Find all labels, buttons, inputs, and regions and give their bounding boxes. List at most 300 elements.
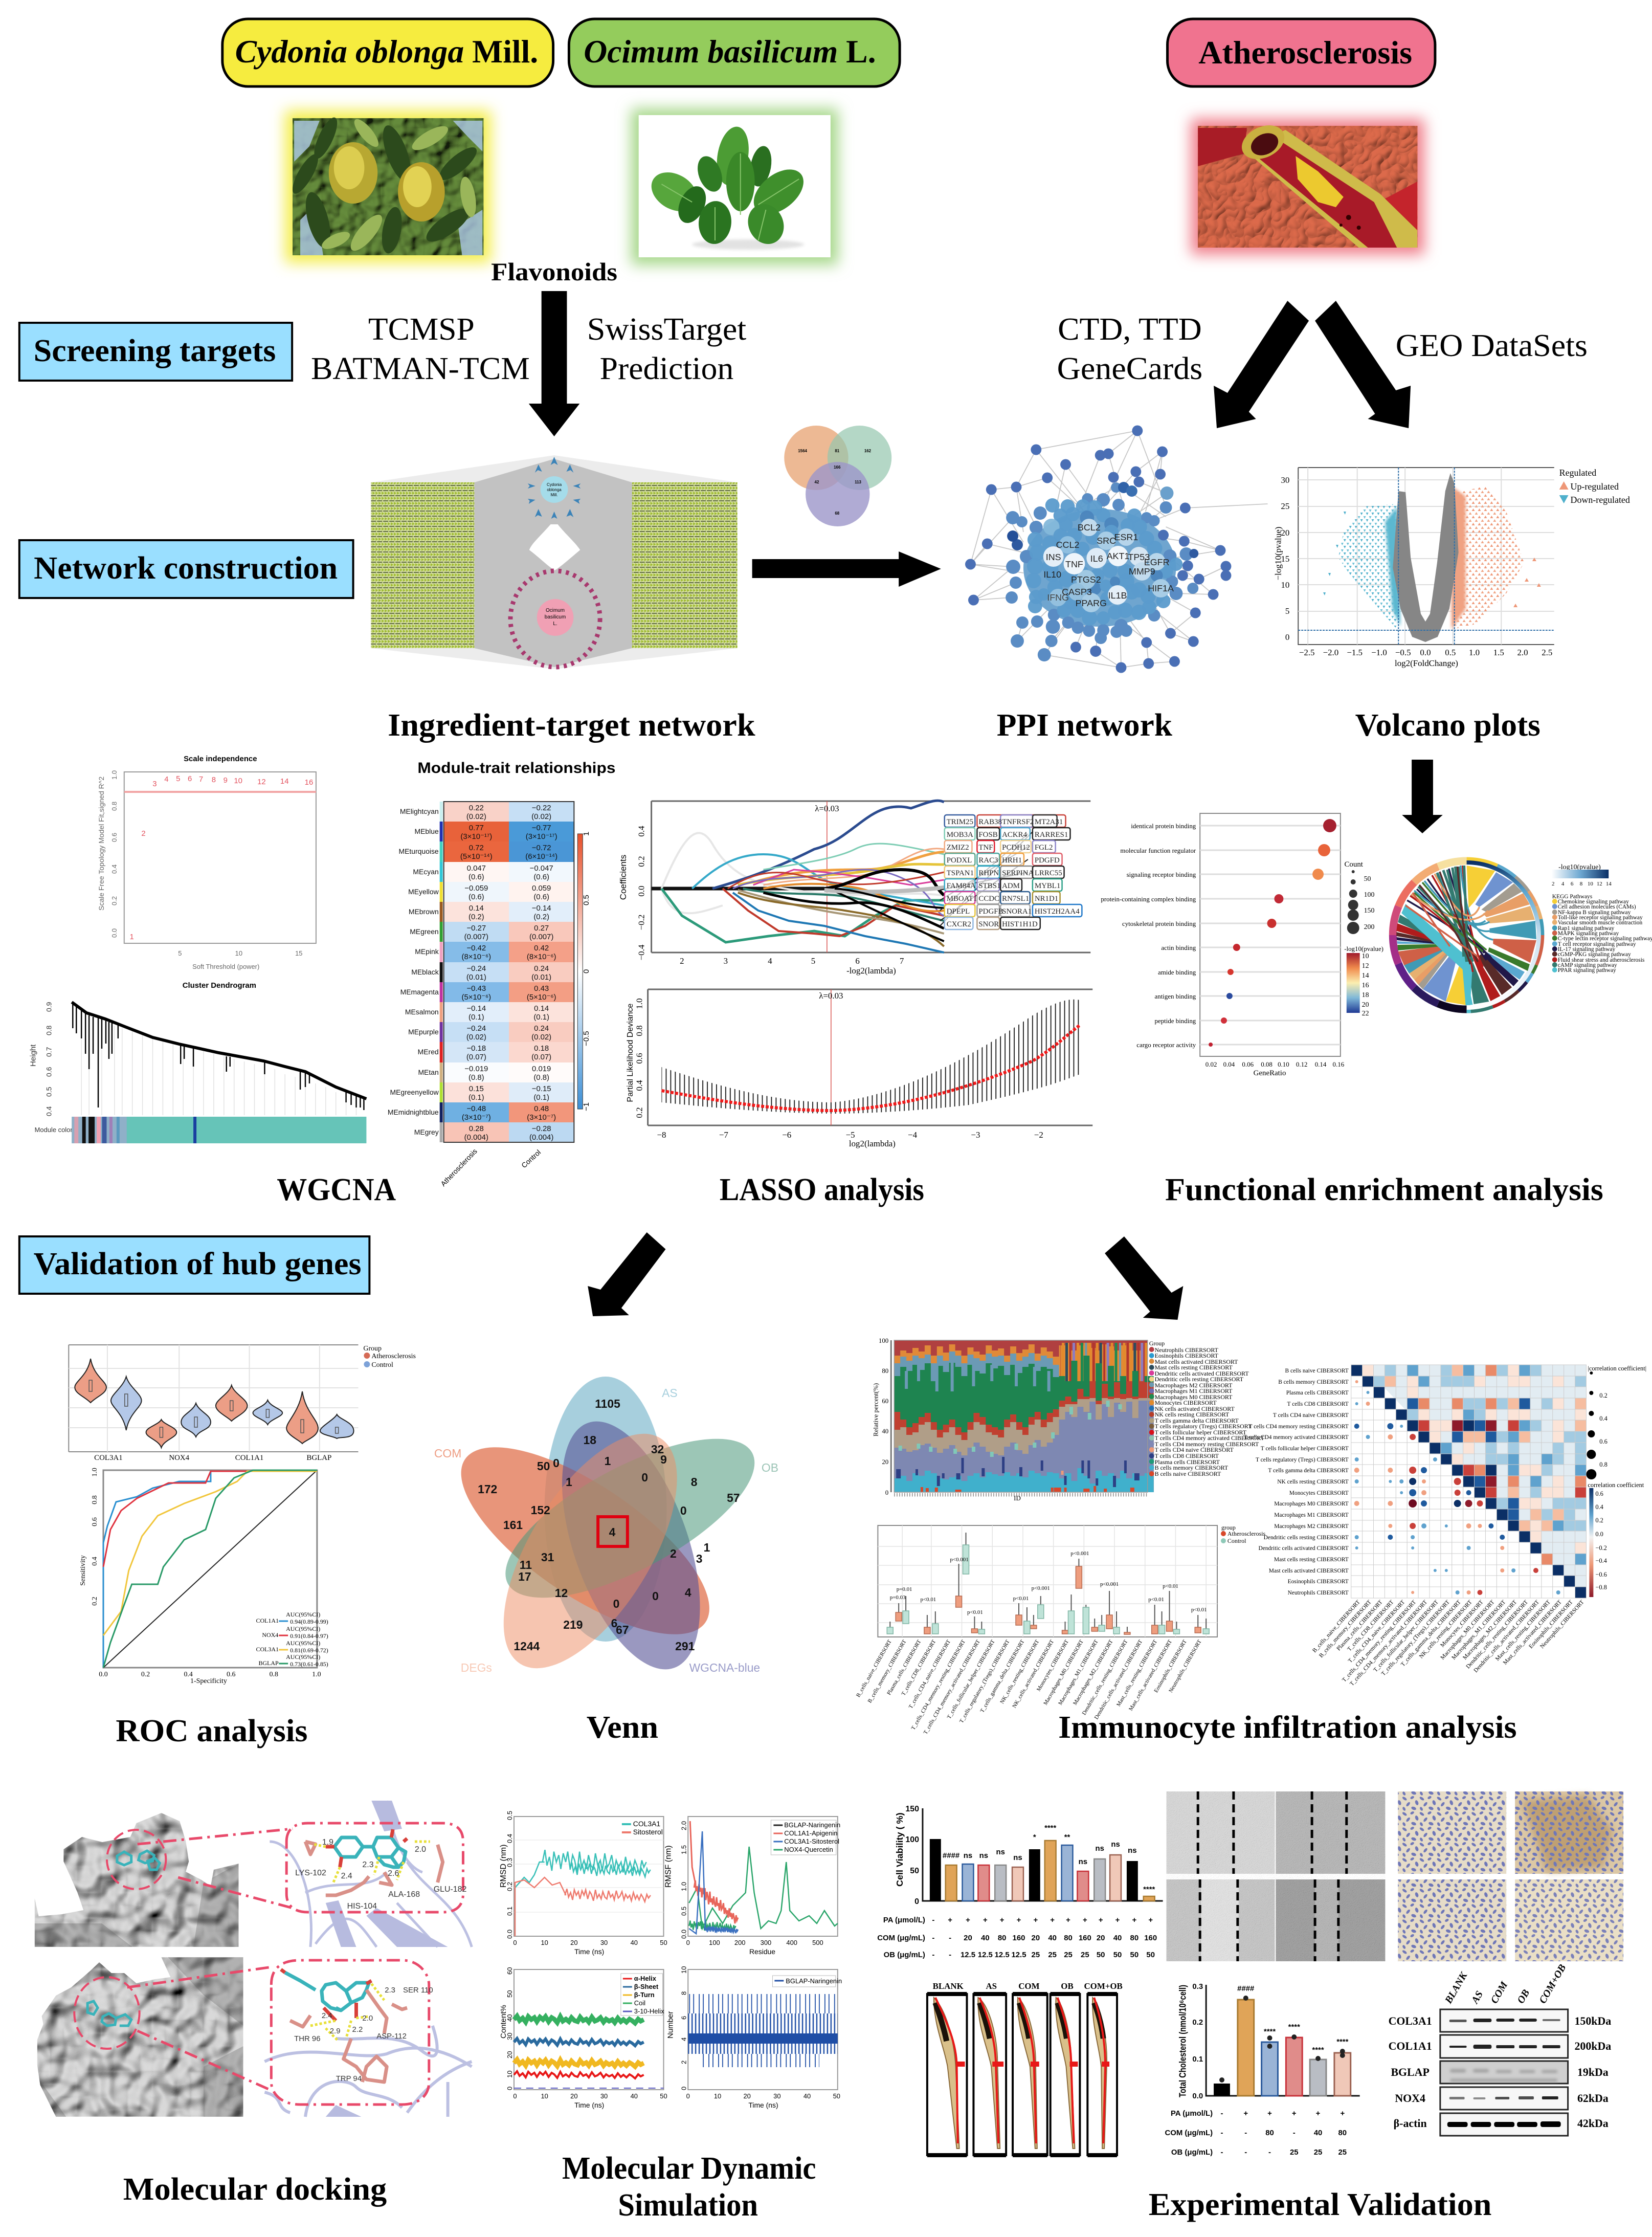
chart: LASSO cross-validation: Partial Likelihood Deviance	[626, 1003, 635, 1102]
legend: immune cell types: NK cells resting CIBERSORT	[1155, 1411, 1230, 1418]
chart: hydrogen bond number: 0	[686, 2092, 690, 2100]
module labels: MEmidnightblue	[388, 1108, 439, 1116]
chart: RMSD: RMSD (nm)	[499, 1845, 508, 1888]
legend: -log10(pvalue): 18	[1362, 991, 1369, 999]
chart: secondary structure content: 50	[660, 2092, 667, 2100]
legend: immune cell types: Macrophages M2 CIBERSORT	[1155, 1382, 1233, 1389]
viability dose table: 50	[1113, 1951, 1122, 1959]
western blot panel: NOX4	[1395, 2092, 1425, 2105]
ROC curve: 0.2	[91, 1597, 99, 1606]
viability dose table: 25	[1032, 1951, 1040, 1959]
ROC curve: 0.8	[91, 1495, 99, 1504]
legend: -log10(pvalue): 22	[1362, 1010, 1369, 1017]
heatmap: module-trait relationships: −0.14	[532, 904, 551, 913]
western blot panel: 150kDa	[1574, 2014, 1611, 2027]
viability dose table: +	[1050, 1916, 1055, 1924]
violin plot	[69, 1345, 416, 1462]
viability dose table: +	[948, 1916, 952, 1924]
western blot panel: OB	[1515, 1987, 1532, 2006]
chart: cluster dendrogram: 0.5	[45, 1087, 53, 1097]
chart: secondary structure content: Time (ns)	[574, 2101, 604, 2109]
row labels: B cells naive CIBERSORT	[1285, 1368, 1349, 1374]
legend: KEGG pathways: MAPK signaling pathway	[1558, 931, 1619, 937]
module labels	[388, 807, 439, 1136]
chart: scale independence: 0.6	[110, 833, 118, 842]
legend: -log10(pvalue) bar: 6	[1571, 881, 1574, 887]
chart: RMSF: 0.5	[680, 1907, 687, 1916]
volcano plot: 10	[1281, 580, 1289, 590]
viability dose table: 50	[1130, 1951, 1138, 1959]
residues 2	[290, 1990, 407, 2082]
heading: Molecular Dynamic Simulation: Simulation	[618, 2188, 758, 2223]
western blot panel: 200kDa	[1574, 2040, 1611, 2052]
viability dose table	[877, 1916, 1157, 1959]
chart: LASSO cross-validation: −7	[719, 1130, 728, 1140]
docking detail: complex 1: GLU-182	[434, 1885, 466, 1894]
set labels: OB	[762, 1461, 778, 1474]
heatmap: module-trait relationships: −0.42	[466, 944, 486, 953]
bar chart: cell viability: 0	[914, 1897, 919, 1906]
viability dose table: +	[1115, 1916, 1120, 1924]
viability dose table: 160	[1013, 1934, 1025, 1942]
downregulated cloud	[1323, 504, 1400, 629]
violin legend: Atherosclerosis	[371, 1353, 416, 1360]
heatmap: module-trait relationships: −0.77	[532, 824, 551, 832]
cholesterol dose table: 80	[1338, 2129, 1347, 2137]
bar chart: total cholesterol: 0.0	[1192, 2092, 1203, 2100]
chart: LASSO coefficient paths: -log2(lambda)	[846, 966, 896, 976]
bar chart: cell viability: ns	[964, 1851, 972, 1860]
chart: scale independence	[97, 755, 316, 970]
gene label boxes: TNFRSF2	[1002, 818, 1034, 826]
chart: RMSF: RMSF (nm)	[664, 1845, 673, 1888]
viability dose table: +	[1000, 1916, 1004, 1924]
bar chart: cell viability: ns	[996, 1848, 1005, 1856]
box plot cell labels: T_cells_CD4_memory_activated_CIBERSORT	[922, 1638, 981, 1735]
heatmap: module-trait relationships: (0.1)	[468, 1013, 484, 1022]
docking detail: complex 2: THR 96	[294, 2034, 321, 2043]
chart: scale independence: 10	[234, 777, 242, 785]
small venn: targets overlap	[784, 426, 891, 526]
violin legend: Control	[371, 1361, 393, 1369]
box plot: immune cell comparison: p<0.01	[1191, 1607, 1207, 1613]
section label: Validation of hub genes	[19, 1236, 369, 1294]
chart: secondary structure content: 20	[570, 2092, 578, 2100]
heatmap: module-trait relationships: Control	[520, 1148, 542, 1169]
text: SwissTarget Prediction: SwissTarget	[587, 311, 747, 347]
gene label boxes: CXCR2	[947, 920, 971, 928]
legend: correlation size: 0.8	[1599, 1461, 1608, 1468]
legend: immune cell types: Group	[1149, 1340, 1165, 1347]
heatmap: module-trait relationships: −0.48	[466, 1104, 486, 1113]
chart: hydrogen bond number: 20	[743, 2092, 751, 2100]
herb label: Ocimum basilicum: Ocimum basilicum L.	[584, 33, 876, 70]
heatmap: module-trait relationships: −0.047	[530, 864, 553, 873]
gene label boxes: MT2A31	[1035, 818, 1063, 826]
chart: hydrogen bond number: 40	[803, 2092, 811, 2100]
module colour bar	[72, 1117, 366, 1143]
heatmap: module-trait relationships: 0.14	[534, 1004, 549, 1013]
photo: quince fruit	[285, 110, 491, 263]
chart: GO dot plot: identical protein binding	[1131, 822, 1196, 830]
heatmap: module-trait relationships: (5×10⁻⁶)	[527, 993, 556, 1002]
herb label: Cydonia oblonga: Cydonia oblonga Mill.	[235, 33, 538, 70]
viability dose table: -	[932, 1951, 934, 1959]
legend: regulated: Regulated	[1559, 468, 1596, 478]
residues 1	[305, 1842, 443, 1895]
ROC legend: NOX4	[262, 1631, 278, 1638]
zebrafish staining panels: OB	[1061, 1981, 1074, 1991]
western blot panel: COL1A1	[1389, 2040, 1432, 2052]
gene label boxes: MBOAT1	[947, 895, 977, 903]
column labels: Neutrophils_CIBERSORT	[1539, 1599, 1586, 1650]
node: Ocimum basilicum hub	[510, 571, 600, 667]
node: Cydonia oblonga hub: Mill.	[550, 493, 558, 497]
bar chart: cell viability: Cell Viability ( %)	[895, 1812, 905, 1887]
herb label: Ocimum basilicum	[569, 19, 900, 86]
heatmap: module-trait relationships: −0.24	[466, 1024, 486, 1033]
legend: hydrogen bonds	[772, 1976, 842, 1987]
gene label boxes: HIST1H1D	[1002, 920, 1038, 928]
box plot: immune cell comparison: p<0.01	[1148, 1597, 1164, 1603]
module labels: MEgreen	[410, 927, 439, 936]
target grid: left	[371, 482, 474, 648]
ROC curve: Sensitivity	[79, 1555, 87, 1586]
column labels: Mast_cells_activated_CIBERSORT	[1502, 1599, 1563, 1666]
bar chart: total cholesterol: 0.2	[1192, 2018, 1203, 2027]
row labels: Dendritic cells resting CIBERSORT	[1264, 1535, 1349, 1541]
box plot: immune cell comparison: p<0.001	[1070, 1551, 1089, 1557]
chart: scale independence: 15	[295, 949, 302, 957]
chart: RMSD: 0	[513, 1939, 517, 1946]
chart: RMSF: 0.0	[680, 1930, 687, 1939]
chart: secondary structure content: 0	[513, 2092, 517, 2100]
volcano plot: −0.5	[1395, 648, 1411, 657]
legend: -log10(pvalue) bar: 2	[1552, 881, 1554, 887]
docked ligand 2	[87, 2001, 131, 2026]
chart: cluster dendrogram: 0.6	[45, 1067, 53, 1077]
violin legend	[363, 1345, 416, 1369]
cholesterol dose table: COM (μg/mL)	[1165, 2129, 1213, 2137]
docking detail: complex 1	[138, 1801, 472, 1947]
gene label boxes: RHPN	[978, 869, 999, 877]
chart: RMSD: 40	[631, 1939, 638, 1946]
legend: immune cell types: T cells regulatory (Tregs) CIBERSORT	[1155, 1423, 1252, 1430]
gene label boxes: LRRC55	[1035, 869, 1062, 877]
module labels: MEpink	[415, 947, 439, 956]
gene label boxes: RAB38	[978, 818, 1002, 826]
zebrafish staining panels: COM+OB	[1084, 1981, 1123, 1991]
chart: secondary structure content: 30	[600, 2092, 608, 2100]
legend: KEGG pathways: KEGG Pathways	[1552, 894, 1593, 900]
heatmap: module-trait relationships: 0.18	[534, 1044, 549, 1053]
box plot cell labels: NK_cells_resting_CIBERSORT	[999, 1638, 1041, 1705]
legend: KEGG pathways: NF-kappa B signaling pathway	[1558, 910, 1631, 916]
set counts: 3	[696, 1552, 702, 1565]
violin plot: COL3A1	[94, 1454, 123, 1462]
row labels: Monocytes CIBERSORT	[1289, 1490, 1349, 1496]
heatmap: module-trait relationships: −0.43	[466, 984, 486, 993]
legend: correlation colour: −0.4	[1595, 1557, 1608, 1564]
chart: scale independence: 1.0	[110, 770, 118, 780]
heatmap: module-trait relationships: 0.059	[532, 884, 551, 893]
legend: count: 200	[1364, 923, 1375, 931]
heatmap: module-trait relationships: (0.6)	[468, 893, 484, 901]
cholesterol dose table: +	[1316, 2109, 1321, 2118]
chart: hydrogen bond number: 10	[714, 2092, 721, 2100]
chart: scale independence: 14	[280, 777, 289, 786]
docking detail: complex 2: 2.4	[322, 2011, 332, 2020]
chart: LASSO coefficient paths: 6	[855, 956, 860, 966]
legend: KEGG pathways: cGMP-PKG signaling pathway	[1558, 951, 1631, 958]
text: CTD TTD GeneCards: CTD, TTD	[1058, 311, 1202, 347]
module labels: MEmagenta	[400, 988, 439, 996]
node: Ocimum basilicum hub: Ocimum	[546, 608, 565, 613]
bar chart: total cholesterol: Total Cholesterol (nmol/10⁶cell)	[1177, 1985, 1188, 2097]
row labels: Plasma cells CIBERSORT	[1286, 1390, 1349, 1396]
chart: LASSO cross-validation: 0.8	[635, 1025, 644, 1036]
western blot panel: β-actin	[1394, 2117, 1427, 2130]
western blot panel: COM	[1489, 1979, 1510, 2006]
gene arc gradient ring	[1393, 861, 1467, 1009]
chart: RMSD	[499, 1811, 667, 1956]
colour scale: −1	[582, 1102, 591, 1111]
grid lines	[1351, 1365, 1586, 1598]
column labels: Eosinophils_CIBERSORT	[1528, 1599, 1574, 1650]
box plot cell labels: Eosinophils_CIBERSORT	[1153, 1638, 1188, 1694]
legend: -log10(pvalue) bar: 12	[1597, 881, 1602, 887]
set counts: 1	[704, 1541, 710, 1554]
set counts: 219	[563, 1618, 583, 1631]
viability dose table: 160	[1144, 1934, 1157, 1942]
heatmap: module-trait relationships: (0.01)	[466, 973, 486, 982]
western blot panel	[1389, 1962, 1611, 2136]
chart: scale independence: Scale Free Topology Model Fit,signed R^2	[97, 777, 105, 911]
heading: ROC analysis: ROC analysis	[116, 1714, 307, 1748]
heatmap: module-trait relationships: −0.15	[532, 1084, 551, 1093]
chart: hydrogen bond number: 30	[773, 2092, 781, 2100]
legend: immune cell types: NK cells activated CIBERSORT	[1155, 1405, 1235, 1412]
chart: secondary structure content	[499, 1967, 667, 2109]
small venn: targets overlap: 1564	[798, 449, 808, 453]
legend: correlation size: 0.6	[1599, 1438, 1608, 1445]
heatmap: module-trait relationships: (0.1)	[468, 1093, 484, 1102]
set counts: 18	[583, 1433, 596, 1447]
chart: hydrogen bond number: 50	[833, 2092, 840, 2100]
legend: KEGG pathways: Toll-like receptor signaling pathway	[1558, 915, 1643, 921]
chart: GO dot plot: antigen binding	[1154, 992, 1196, 1000]
colour scale	[577, 832, 591, 1111]
bar chart: cell viability: 150	[905, 1805, 919, 1813]
chart: LASSO cross-validation: log2(lambda)	[849, 1139, 896, 1148]
box plot: immune cell comparison: p=0.01	[897, 1586, 912, 1592]
gene label boxes: SERPINA	[1002, 869, 1034, 877]
viability dose table: +	[1066, 1916, 1070, 1924]
mid-degree nodes	[1006, 482, 1198, 661]
chart: LASSO coefficient paths: Coefficients	[618, 855, 628, 900]
arrow: flavonoids to network	[529, 291, 579, 436]
legend: immune cell types: T cells CD4 memory activated CIBERSORT	[1155, 1434, 1265, 1442]
chart: hydrogen bond number: Time (ns)	[748, 2101, 778, 2109]
gene label boxes: HRH1	[1002, 856, 1022, 865]
legend: KEGG pathways: cAMP signaling pathway	[1558, 962, 1617, 968]
chart: RMSD: 0.3	[506, 1858, 514, 1867]
gene label boxes: HIST2H2AA4	[1035, 907, 1080, 916]
colour scale: 0	[582, 969, 591, 973]
PPI network: TP53	[1128, 552, 1150, 562]
set counts: 31	[541, 1551, 554, 1564]
legend: immune cell types: Neutrophils CIBERSORT	[1155, 1346, 1219, 1354]
box plot: immune cell comparison: p<0.01	[1163, 1583, 1178, 1589]
small venn: targets overlap: 68	[835, 511, 840, 516]
heatmap: module-trait relationships: 0.24	[534, 1024, 549, 1033]
column labels: NK_cells_resting_CIBERSORT	[1418, 1599, 1474, 1660]
ROC legend: AUC(95%CI)	[286, 1653, 320, 1660]
set counts: 32	[651, 1443, 664, 1456]
cholesterol dose table: -	[1221, 2129, 1223, 2137]
bar chart: total cholesterol: ****	[1264, 2027, 1276, 2036]
PPI network: IFNG	[1047, 592, 1069, 603]
chart: scale independence: 0.8	[110, 802, 118, 811]
viability dose table: 50	[1097, 1951, 1105, 1959]
violin plot: BGLAP	[306, 1454, 331, 1462]
set counts: 2	[670, 1547, 677, 1560]
stacked bar: immune cell fractions: 0	[885, 1489, 888, 1496]
box plot cell labels: Macrophages_M2_CIBERSORT	[1072, 1638, 1114, 1706]
module labels: MEpurple	[408, 1028, 439, 1036]
chart: hydrogen bond number	[666, 1966, 842, 2109]
volcano plot: 5	[1285, 606, 1289, 616]
colour scale: 1	[582, 832, 591, 836]
set counts: 1	[605, 1454, 611, 1468]
viability dose table: 50	[1146, 1951, 1155, 1959]
legend: RMSD: COL3A1	[633, 1820, 660, 1828]
module labels: MEcyan	[413, 868, 439, 876]
chart: cluster dendrogram: Module colors	[35, 1126, 76, 1134]
volcano plot: 1.0	[1469, 648, 1480, 657]
heatmap: module-trait relationships: −0.28	[532, 1124, 551, 1133]
legend: correlation colour: 0.4	[1595, 1503, 1604, 1511]
gene label boxes: FAM84A	[947, 882, 976, 890]
viability dose table: 12.5	[995, 1951, 1010, 1959]
chart: RMSF: 1.5	[680, 1845, 687, 1854]
bar chart: cell viability: *	[1033, 1833, 1036, 1842]
legend: immune cell types: T cells CD4 memory resting CIBERSORT	[1155, 1441, 1259, 1448]
set labels: AS	[662, 1386, 678, 1400]
set labels: WGCNA-blue	[689, 1661, 760, 1674]
legend: RMSD: Sitosterol	[633, 1828, 663, 1836]
row labels: T cells follicular helper CIBERSORT	[1261, 1446, 1349, 1452]
correlation matrix: immune cells	[1243, 1365, 1646, 1687]
legend: immune cell types: Eosinophils CIBERSORT	[1155, 1352, 1219, 1359]
chart: LASSO cross-validation: 0.2	[635, 1107, 644, 1118]
heatmap title: Module-trait relationships	[417, 760, 615, 777]
legend: RMSF: COL1A1-Apigenin	[784, 1829, 837, 1837]
docking detail: complex 2: 2.0	[362, 2014, 373, 2023]
chart: LASSO coefficient paths: −0.2	[637, 915, 646, 930]
PPI network: BCL2	[1078, 522, 1101, 533]
legend: immune cell types: Mast cells activated CIBERSORT	[1155, 1358, 1238, 1365]
legend: correlation colour: 0.2	[1595, 1517, 1603, 1524]
heatmap: module-trait relationships: (0.07)	[531, 1053, 551, 1061]
chart: RMSF: 400	[786, 1939, 797, 1946]
column labels: T_cells_gamma_delta_CIBERSORT	[1400, 1599, 1462, 1668]
box plot cell labels: Neutrophils_CIBERSORT	[1168, 1638, 1203, 1694]
box plot: immune cell comparison: p=0.03	[890, 1594, 906, 1601]
pathway ribbons right	[1459, 866, 1536, 1005]
column labels: T_cells_CD8_CIBERSORT	[1346, 1599, 1395, 1652]
chart: LASSO cross-validation: −2	[1034, 1130, 1043, 1140]
chart: scale independence: 16	[305, 778, 313, 787]
chart: GO dot plot: 0.02	[1205, 1060, 1217, 1068]
unchanged points	[1393, 473, 1459, 642]
box plot: immune cell comparison	[855, 1524, 1266, 1735]
bar chart: cell viability: ns	[979, 1851, 988, 1860]
photo: basil leaves	[631, 108, 838, 265]
chart: scale independence: 4	[164, 775, 169, 784]
PPI network: CCL2	[1056, 540, 1079, 550]
row labels: Mast cells resting CIBERSORT	[1274, 1557, 1349, 1563]
bar chart: total cholesterol: ****	[1288, 2023, 1300, 2031]
volcano plot: −2.5	[1299, 648, 1314, 657]
volcano plot: −1.0	[1371, 648, 1387, 657]
gene label boxes: FGL2	[1035, 844, 1053, 852]
cholesterol dose table: PA (μmol/L)	[1171, 2109, 1213, 2118]
chart: cluster dendrogram: 0.9	[45, 1002, 53, 1012]
chart: scale independence: 0.0	[110, 928, 118, 938]
legend: -log10(pvalue) bar: 4	[1561, 881, 1565, 887]
bar chart: total cholesterol	[1165, 1982, 1360, 2157]
gene label boxes: SNOR	[978, 920, 999, 928]
text: TCMSP BATMAN-TCM	[311, 311, 530, 386]
set counts: 50	[537, 1459, 550, 1473]
module labels: MEblack	[411, 968, 439, 976]
chart: RMSD: 0.5	[506, 1811, 514, 1820]
legend: KEGG pathways: T cell receptor signaling pathway	[1558, 941, 1636, 947]
ROC curve: 0.2	[141, 1671, 150, 1678]
docking detail: complex 2: TRP 94	[336, 2074, 362, 2083]
set counts: 291	[675, 1640, 695, 1653]
legend: KEGG pathways: Rap1 signaling pathway	[1558, 925, 1615, 932]
legend: immune cell types: T cells gamma delta CIBERSORT	[1155, 1417, 1239, 1424]
stacked bar: immune cell fractions: Relative percent(%)	[872, 1383, 879, 1436]
target grid: right	[632, 482, 738, 648]
legend: immune cell types: Monocytes CIBERSORT	[1155, 1399, 1217, 1406]
stacked bar: immune cell fractions: 40	[882, 1427, 888, 1435]
chart: cluster dendrogram: 0.8	[45, 1025, 53, 1035]
box plot cell labels: T_cells_regulatory_(Tregs)_CIBERSORT	[958, 1638, 1011, 1724]
small venn: targets overlap: 113	[855, 480, 862, 484]
colour scale: 0.5	[582, 895, 591, 905]
viability dose table: +	[1017, 1916, 1021, 1924]
cholesterol dose table: -	[1293, 2129, 1296, 2137]
set counts	[478, 1397, 740, 1653]
chart: secondary structure content: 20	[506, 2051, 514, 2058]
legend: correlation size: 0.4	[1599, 1415, 1608, 1422]
chart: RMSF: 0	[686, 1939, 690, 1946]
set counts: 4	[685, 1586, 691, 1599]
ROC legend: 0.73(0.61-0.85)	[290, 1660, 328, 1668]
ROC legend: AUC(95%CI)	[286, 1640, 320, 1647]
chart: scale independence: 0.4	[110, 865, 118, 874]
box plot cell labels	[855, 1638, 1203, 1735]
heatmap: module-trait relationships: 0.72	[469, 844, 484, 852]
chart: GO dot plot: 0.10	[1278, 1060, 1289, 1068]
blot bands	[1447, 2019, 1561, 2127]
chart: LASSO cross-validation: −4	[908, 1130, 918, 1140]
chart: scale independence: 1	[130, 933, 134, 941]
heading: WGCNA: WGCNA	[277, 1172, 396, 1207]
